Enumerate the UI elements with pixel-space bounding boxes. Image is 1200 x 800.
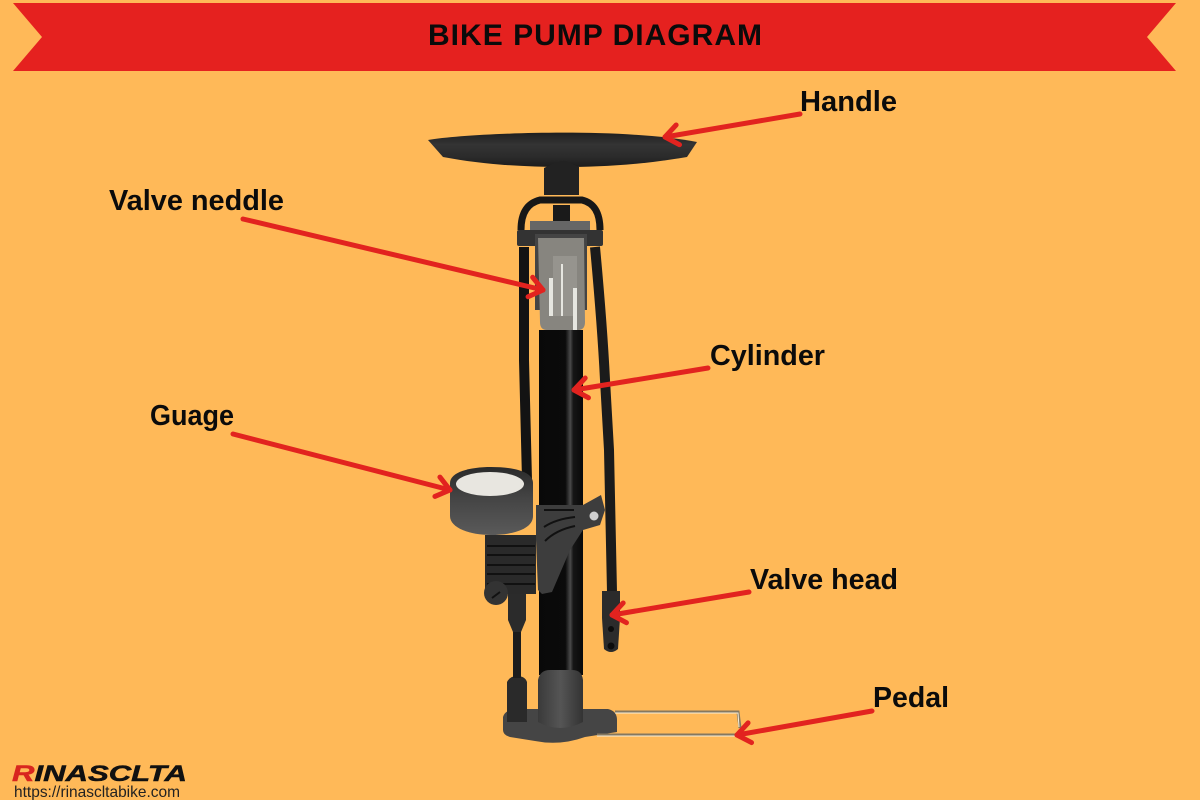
top plate <box>530 221 590 232</box>
callout: handle: Handle <box>800 86 897 118</box>
callout: pedal: Pedal <box>873 682 949 714</box>
callout: valve head: Valve head <box>750 564 898 596</box>
base plate <box>503 709 617 743</box>
illustration: bike floor pump <box>428 133 740 743</box>
callout: cylinder <box>574 340 825 390</box>
title banner <box>13 3 1176 71</box>
valve head holes <box>608 626 614 650</box>
chamber inner panel <box>553 256 577 316</box>
ribbed gauge block <box>485 535 536 594</box>
callout: handle <box>665 86 897 137</box>
transparent chamber <box>538 238 585 330</box>
pump left hose <box>524 247 527 480</box>
cylinder bracket <box>536 495 605 594</box>
valve head <box>602 591 620 652</box>
rear chamber shell <box>535 234 587 310</box>
lower gauge tube <box>513 630 521 678</box>
valve needles <box>549 264 577 330</box>
pump cylinder <box>539 330 583 675</box>
pump right hose <box>595 247 612 592</box>
handle stem <box>544 161 579 195</box>
bracket bolt <box>590 512 598 520</box>
bracket ribs <box>544 510 575 541</box>
pedal rails <box>597 712 740 736</box>
brand logo: R INASCLTA <box>12 761 187 786</box>
piston rod <box>553 205 570 231</box>
release knob <box>484 581 508 605</box>
callout: cylinder: Cylinder <box>710 340 825 372</box>
hose connector <box>508 592 526 632</box>
callout: gauge <box>150 400 450 490</box>
cylinder foot cap <box>538 670 583 728</box>
gauge housing <box>450 467 533 535</box>
brand logo <box>12 761 187 800</box>
callout: valve needle <box>109 185 543 290</box>
title: BIKE PUMP DIAGRAM <box>428 19 762 52</box>
gauge face <box>456 472 524 496</box>
pump handle <box>428 133 697 167</box>
callout: pedal <box>737 682 949 735</box>
callout: valve needle: Valve neddle <box>109 185 284 217</box>
top collar <box>517 230 603 246</box>
foot knob <box>507 676 527 722</box>
callout: valve head <box>612 564 898 615</box>
callout: gauge: Guage <box>150 400 234 432</box>
top arch <box>521 200 600 230</box>
